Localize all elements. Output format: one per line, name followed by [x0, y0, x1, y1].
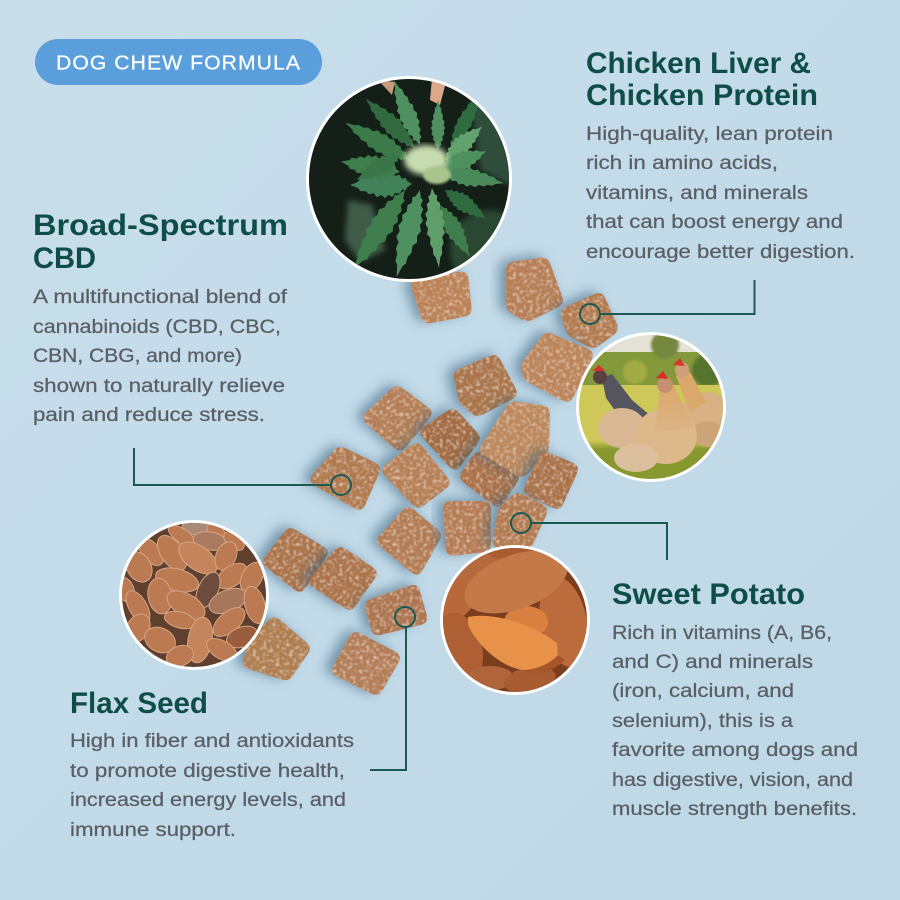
text block: sweet potato	[612, 578, 858, 820]
photo: sweet potatoes	[440, 545, 590, 695]
text block: sweet potato: and C) and minerals	[612, 652, 813, 673]
text block: flax: High in fiber and antioxidants	[70, 731, 354, 752]
text block: sweet potato: selenium), this is a	[612, 711, 793, 732]
text block: CBD	[33, 209, 288, 426]
text block: sweet potato: has digestive, vision, and	[612, 770, 853, 791]
text block: sweet potato: Rich in vitamins (A, B6,	[612, 623, 832, 644]
text block: flax: increased energy levels, and	[70, 790, 346, 811]
text block: flax: to promote digestive health,	[70, 761, 345, 782]
rear buff hen	[673, 358, 723, 447]
callout connector: flax	[370, 607, 415, 770]
text block: sweet potato: muscle strength benefits.	[612, 799, 857, 820]
text block: chicken: rich in amino acids,	[586, 153, 778, 174]
text block: CBD: cannabinoids (CBD, CBC,	[33, 317, 281, 338]
callout connector: CBD	[134, 448, 351, 495]
text block: CBD: pain and reduce stress.	[33, 405, 265, 426]
badge: dog chew formula	[35, 39, 322, 85]
text block: chicken: Chicken Protein	[586, 79, 818, 112]
text block: chicken: that can boost energy and	[586, 212, 843, 233]
photo: chickens in a field	[576, 332, 726, 482]
text block: chicken: Chicken Liver &	[586, 47, 811, 80]
grey barred hen	[592, 365, 652, 448]
text block: chicken: encourage better digestion.	[586, 242, 855, 263]
text block: chicken: vitamins, and minerals	[586, 183, 808, 204]
text block: sweet potato: Sweet Potato	[612, 578, 805, 611]
chew pile	[246, 261, 615, 692]
text block: CBD: CBD	[33, 242, 96, 275]
photo: flax seeds	[119, 520, 269, 670]
front buff hen	[614, 371, 697, 472]
callout connector: sweet potato	[511, 513, 667, 560]
text block: sweet potato: favorite among dogs and	[612, 740, 858, 761]
text block: flax: Flax Seed	[70, 687, 208, 720]
text block: flax: immune support.	[70, 820, 236, 841]
text block: CBD: CBN, CBG, and more)	[33, 346, 242, 367]
text block: CBD: A multifunctional blend of	[33, 287, 288, 308]
text block: chicken	[586, 47, 855, 263]
text block: CBD: Broad-Spectrum	[33, 209, 288, 242]
badge: dog chew formula: DOG CHEW FORMULA	[56, 52, 301, 74]
text block: chicken: High-quality, lean protein	[586, 124, 833, 145]
text block: sweet potato: (iron, calcium, and	[612, 681, 794, 702]
callout connector: chicken	[580, 280, 754, 324]
text block: CBD: shown to naturally relieve	[33, 376, 285, 397]
text block: flax	[70, 687, 354, 841]
photo: hemp plant	[306, 76, 512, 282]
